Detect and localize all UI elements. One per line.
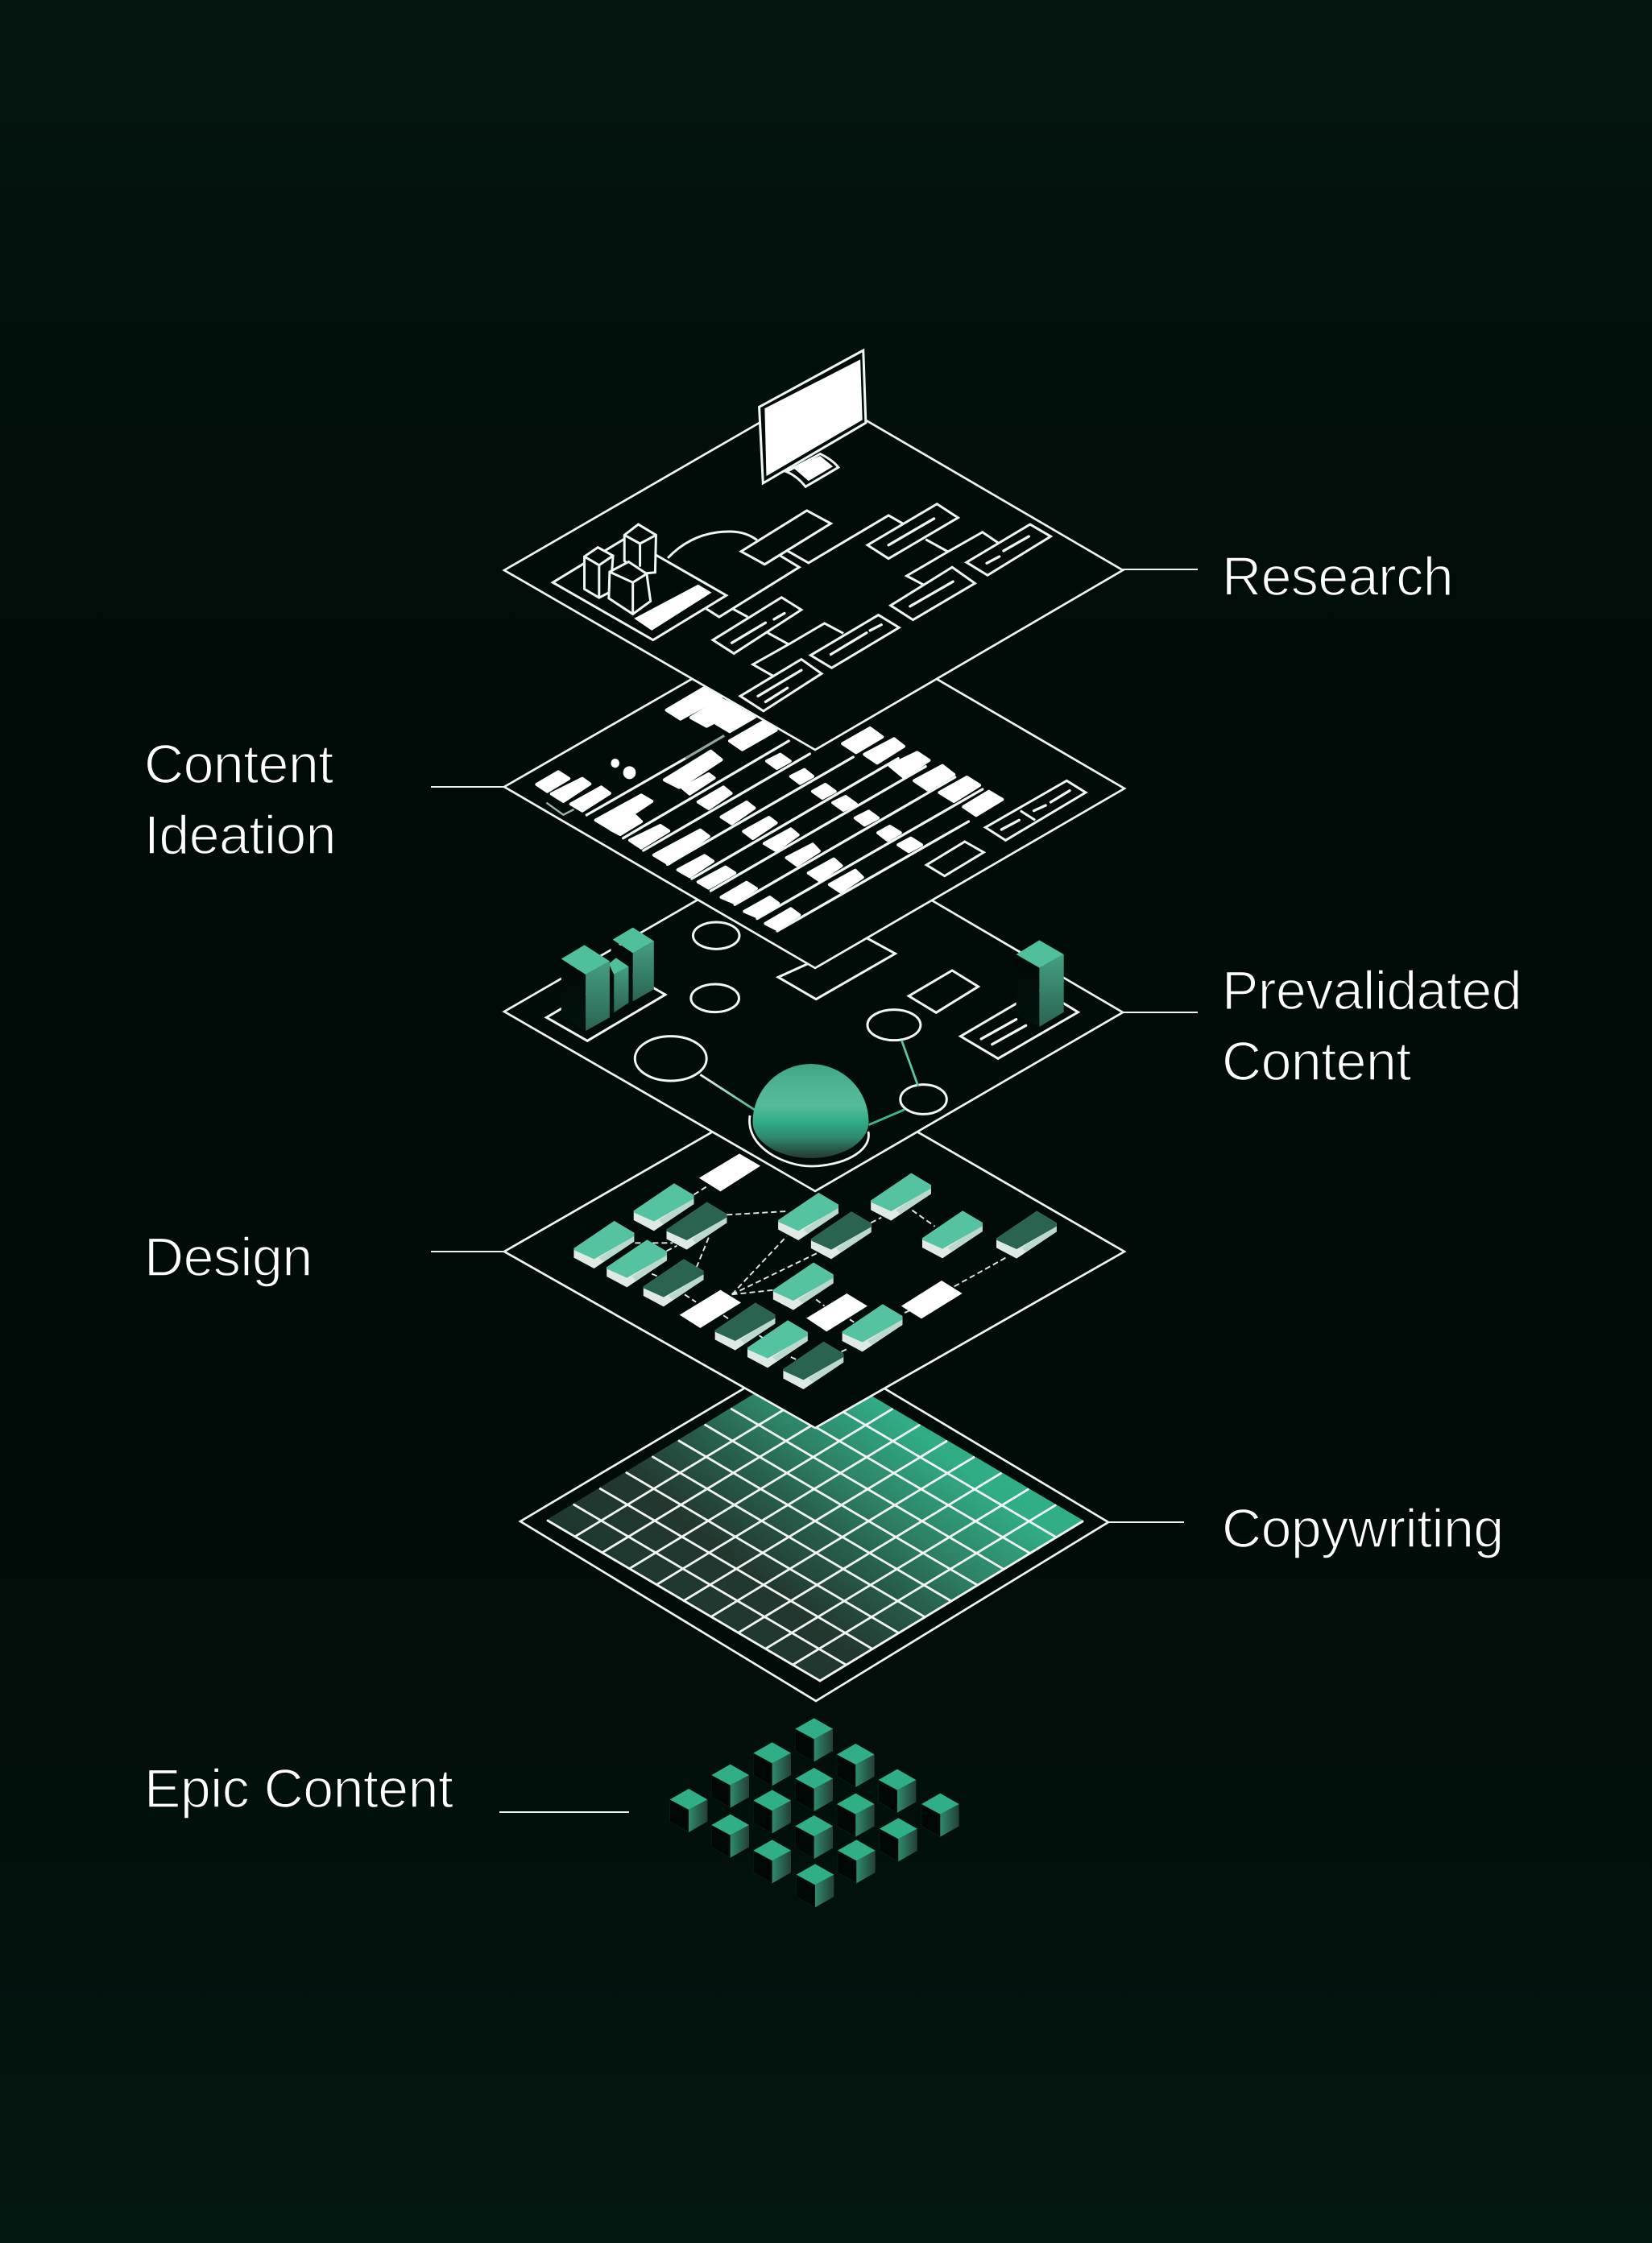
layer: research plate — [504, 350, 1123, 750]
label: prevalidated content: Content — [1222, 1031, 1411, 1092]
research flow diagram — [553, 350, 1050, 711]
faded rule — [586, 759, 685, 816]
label: content ideation: Ideation — [144, 805, 336, 866]
box: node 7 — [740, 660, 822, 711]
grid lines — [548, 1377, 1083, 1681]
design flow diagram — [573, 1153, 1057, 1389]
leader: content ideation — [431, 786, 505, 788]
box: node 4 — [891, 567, 975, 620]
layer: content ideation plate — [504, 608, 1124, 968]
box: node 6 — [810, 615, 899, 668]
layer: copywriting grid plate — [520, 1347, 1108, 1701]
outlined box — [778, 937, 896, 999]
box: node 2 — [867, 504, 958, 559]
plate outline: design — [504, 1073, 1124, 1428]
dots — [611, 759, 619, 768]
label: content ideation: Content — [144, 734, 333, 795]
box: node 3 — [967, 524, 1050, 575]
dashed connectors — [635, 1186, 1006, 1359]
label: prevalidated content: Prevalidated — [1222, 960, 1522, 1021]
label: epic content: Epic Content — [144, 1758, 453, 1819]
circles — [693, 922, 739, 949]
leader: design — [431, 1251, 505, 1252]
plate outline: research — [504, 391, 1123, 750]
label: copywriting: Copywriting — [1222, 1498, 1504, 1559]
dark green blocks — [644, 1202, 1057, 1389]
leader: research — [1123, 569, 1198, 570]
leader: prevalidated content — [1123, 1012, 1198, 1013]
light green blocks — [573, 1173, 983, 1368]
connector wires — [700, 1074, 755, 1110]
label: research: Research — [1222, 546, 1453, 607]
left towers — [561, 928, 654, 1031]
grid fill — [548, 1361, 1083, 1681]
legend box — [985, 780, 1086, 840]
plate outline: prevalidated content — [504, 832, 1123, 1191]
left platform — [546, 971, 665, 1041]
timeline chart — [536, 688, 1086, 931]
small corner mark — [546, 803, 573, 815]
leader: epic content — [499, 1811, 629, 1813]
right platform with text lines — [961, 989, 1078, 1058]
arc link — [668, 532, 757, 558]
label: design: Design — [144, 1227, 313, 1288]
right tower — [1016, 940, 1064, 1027]
layer: design plate — [504, 1073, 1124, 1428]
empty box — [926, 842, 983, 876]
building wireframes — [585, 524, 656, 614]
white schedule bars — [536, 688, 1002, 929]
platform with white bar — [553, 538, 727, 640]
plate outline: content ideation — [504, 608, 1124, 968]
leader: copywriting — [1108, 1521, 1184, 1523]
horizontal timeline rules — [623, 741, 983, 931]
connector lines — [706, 515, 998, 676]
box: node 5 — [713, 598, 801, 653]
prevalidated content details — [546, 922, 1078, 1125]
plate outline: copywriting — [520, 1347, 1108, 1701]
icon: monitor — [760, 350, 866, 486]
base ring of dome — [750, 1115, 868, 1166]
layer: prevalidated content plate — [504, 832, 1123, 1191]
layer: epic content cubes — [670, 1718, 959, 1907]
box: top node — [741, 511, 830, 565]
white nodes — [699, 1153, 760, 1191]
small outlined box — [909, 970, 979, 1012]
dome — [752, 1064, 868, 1158]
